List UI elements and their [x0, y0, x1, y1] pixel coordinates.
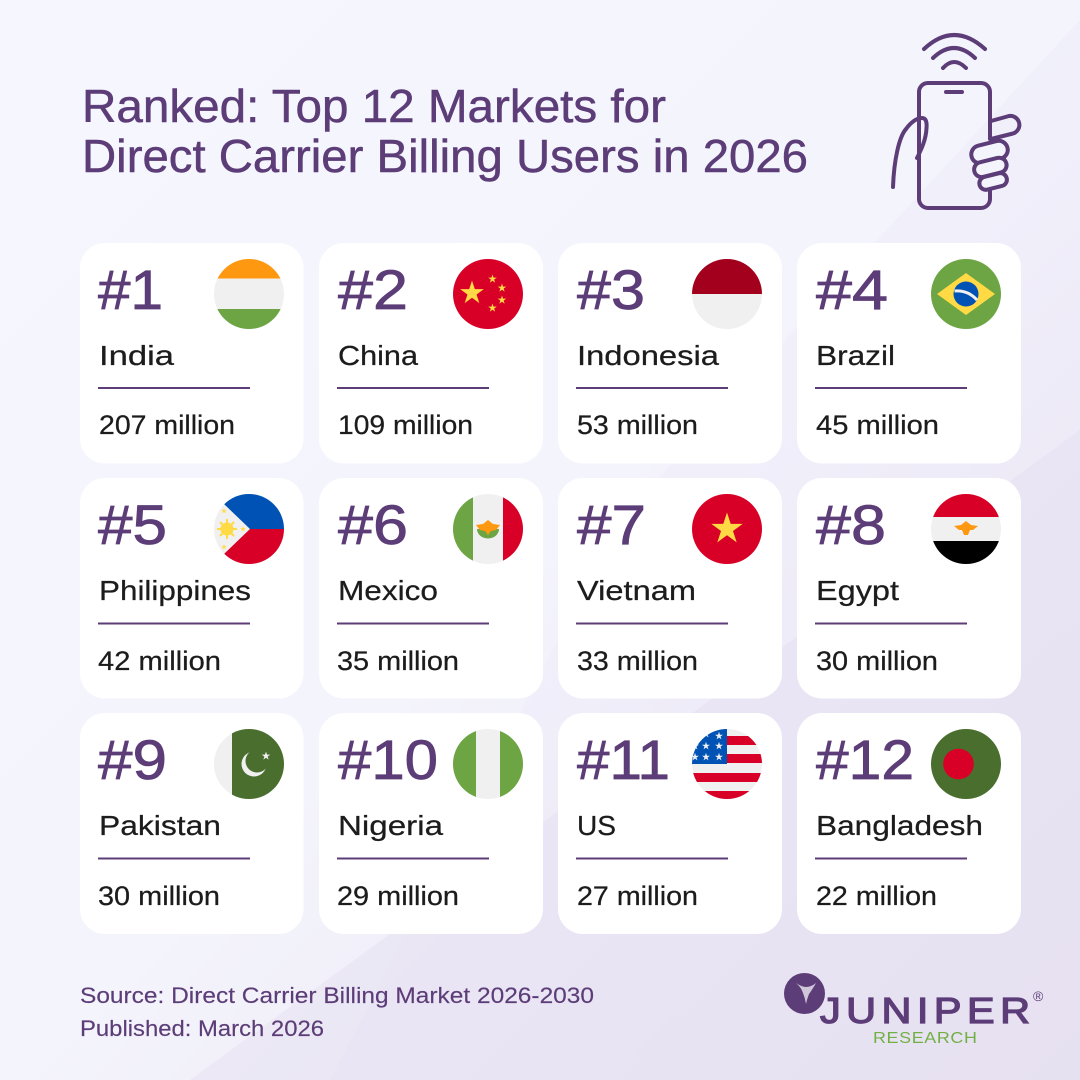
panel: #6 Mexico [319, 478, 543, 698]
panel: #11 US: US [577, 810, 616, 841]
panel: #7 Vietnam: #7 [577, 493, 646, 556]
source note [80, 983, 594, 1041]
title [82, 80, 808, 182]
flag: China [453, 259, 523, 329]
flag: Brazil [931, 259, 1001, 329]
panel: #3 Indonesia: #3 [577, 258, 645, 321]
panel: #10 Nigeria [319, 713, 543, 934]
logo: Juniper Research: RESEARCH [873, 1029, 977, 1047]
logo: Juniper Research: JUNIPER [820, 991, 1030, 1031]
panel: #10 Nigeria: #10 [338, 728, 438, 791]
flag: Pakistan [214, 729, 284, 799]
logo: Juniper Research [784, 973, 1044, 1047]
panel: #12 Bangladesh: #12 [816, 728, 914, 791]
panel: #3 Indonesia [558, 243, 782, 464]
panel: #6 Mexico: 35 million [337, 646, 459, 676]
panel: #1 India [80, 243, 304, 464]
flag: Indonesia [692, 259, 762, 329]
flag: Nigeria [453, 729, 523, 799]
panel: #3 Indonesia: 53 million [577, 410, 698, 440]
title: Ranked: Top 12 Markets for [82, 80, 666, 132]
title: Direct Carrier Billing Users in 2026 [82, 130, 808, 182]
panel: #8 Egypt [797, 478, 1021, 698]
panel: #9 Pakistan [80, 713, 304, 934]
panel: #11 US: 27 million [577, 881, 698, 911]
panel: #7 Vietnam: Vietnam [577, 575, 696, 606]
source note: Published: March 2026 [80, 1016, 324, 1041]
panel: #6 Mexico: #6 [338, 493, 408, 556]
flag: India [214, 259, 284, 329]
panel: #10 Nigeria: Nigeria [338, 810, 444, 841]
flag: Egypt [931, 494, 1001, 564]
source note: Source: Direct Carrier Billing Market 2026-2030 [80, 983, 594, 1008]
panel: #1 India: 207 million [99, 410, 235, 440]
flag: Vietnam [692, 494, 762, 564]
panel: #9 Pakistan: Pakistan [99, 810, 221, 841]
flag: Mexico [453, 494, 523, 564]
panel: #2 China [319, 243, 543, 464]
panel: #10 Nigeria: 29 million [337, 881, 459, 911]
panel: #12 Bangladesh: 22 million [816, 881, 937, 911]
panel: #1 India: India [99, 340, 175, 371]
panel: #8 Egypt: Egypt [816, 575, 899, 606]
panel: #5 Philippines: Philippines [99, 575, 251, 606]
panel: #9 Pakistan: #9 [98, 728, 167, 791]
logo: Juniper Research: ® [1033, 988, 1044, 1004]
panel: #9 Pakistan: 30 million [98, 881, 220, 911]
panel: #11 US [558, 713, 782, 934]
panel: #2 China: China [338, 340, 418, 371]
panel: #4 Brazil: 45 million [816, 410, 939, 440]
panel: #7 Vietnam: 33 million [577, 646, 698, 676]
panel: #5 Philippines [80, 478, 304, 698]
panel: #3 Indonesia: Indonesia [577, 340, 719, 371]
flag: Philippines [214, 494, 284, 564]
panel: #4 Brazil: #4 [816, 258, 888, 321]
flag: US [691, 729, 762, 799]
panel: #1 India: #1 [98, 258, 163, 321]
flag: Bangladesh [931, 729, 1001, 799]
panel: #2 China: #2 [338, 258, 408, 321]
panel: #4 Brazil [797, 243, 1021, 464]
panel: #7 Vietnam [558, 478, 782, 698]
panel: #6 Mexico: Mexico [338, 575, 438, 606]
panel: #2 China: 109 million [338, 410, 473, 440]
panel: #12 Bangladesh [797, 713, 1021, 934]
panel: #8 Egypt: 30 million [816, 646, 938, 676]
panel: #12 Bangladesh: Bangladesh [816, 810, 983, 841]
icon: hand holding phone with wireless signal [893, 35, 1019, 208]
panel: #5 Philippines: #5 [98, 493, 167, 556]
panel: #5 Philippines: 42 million [98, 646, 221, 676]
panel: #11 US: #11 [577, 728, 670, 791]
panel: #8 Egypt: #8 [816, 493, 886, 556]
panel: #4 Brazil: Brazil [816, 340, 895, 371]
